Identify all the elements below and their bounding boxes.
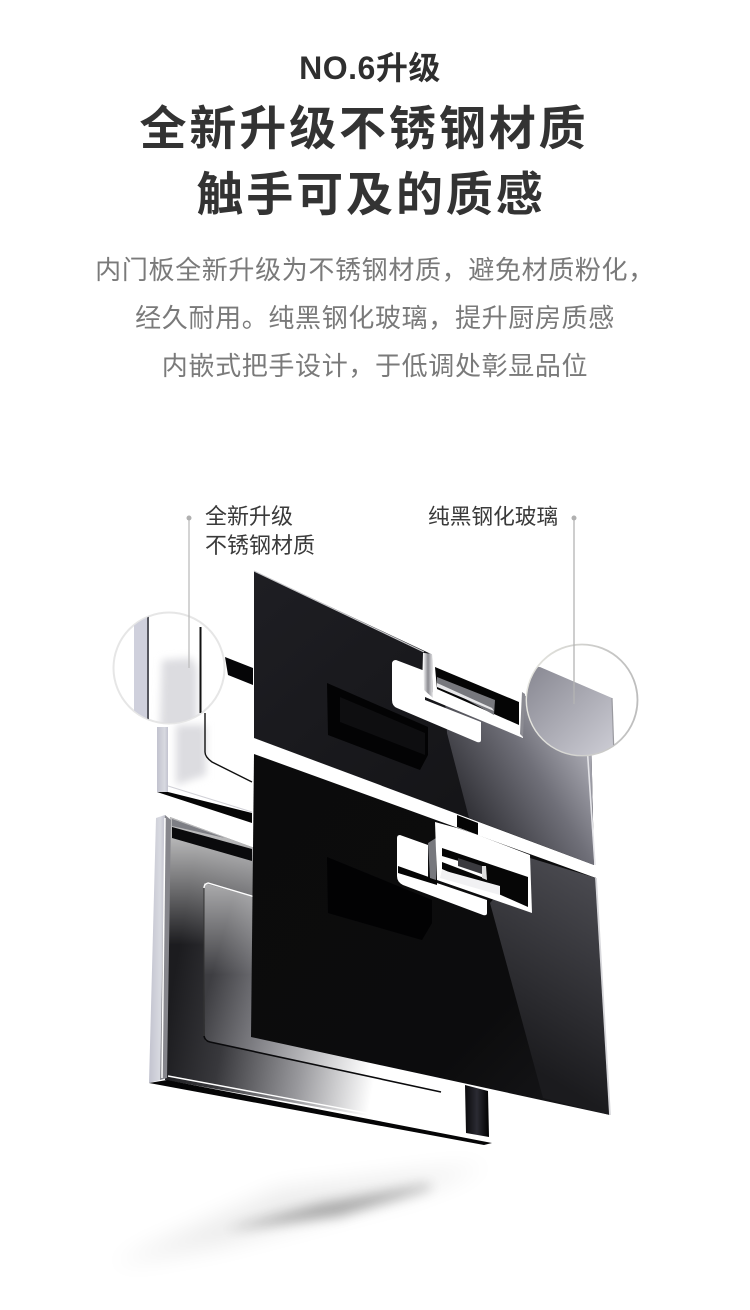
brushed patch [176, 725, 206, 785]
title: 触手可及的质感 [196, 168, 546, 221]
frame bottom edge [149, 1080, 492, 1145]
recessed handle [327, 857, 432, 940]
label [205, 504, 315, 558]
label: 全新升级 [205, 504, 293, 529]
magnifier: brushed steel [114, 612, 224, 730]
description text: 内嵌式把手设计，于低调处彰显品位 [162, 351, 588, 381]
glass reflection [490, 858, 610, 1115]
inner panel [204, 883, 445, 1092]
black connector [457, 815, 478, 835]
leader dot [186, 516, 192, 520]
label: 不锈钢材质 [205, 533, 315, 558]
leader dot [572, 516, 576, 520]
callout: black tempered glass [428, 504, 638, 760]
lower steel frame [149, 815, 500, 1145]
lower glass panel [251, 754, 610, 1115]
label: 纯黑钢化玻璃 [428, 504, 558, 529]
frame black band [157, 792, 252, 823]
title [139, 102, 589, 221]
leader line [188, 518, 190, 668]
description text: 经久耐用。纯黑钢化玻璃，提升厨房质感 [135, 303, 615, 333]
description text: 内门板全新升级为不锈钢材质，避免材质粉化， [95, 255, 655, 285]
recessed handle [327, 683, 428, 770]
upper glass panel [254, 571, 595, 865]
title: 全新升级不锈钢材质 [139, 102, 589, 155]
glass reflection [445, 683, 594, 865]
upper steel frame [157, 657, 253, 823]
frame dark slot [172, 827, 252, 861]
frame chrome lip [172, 819, 225, 838]
frame inner line [205, 713, 252, 782]
section label: NO.6升级 [299, 50, 441, 86]
callout: stainless steel [114, 504, 315, 730]
floor shadow [110, 1165, 490, 1265]
white plate behind [397, 835, 487, 915]
chrome handle [422, 653, 525, 738]
frame highlight line [168, 1076, 430, 1125]
rear post [465, 1085, 489, 1137]
leader line [573, 518, 575, 704]
magnifier: glass corner [520, 644, 638, 760]
frame edge strip [149, 815, 165, 1083]
white cut-out [392, 660, 481, 742]
description text [95, 255, 655, 381]
white plate front [435, 822, 532, 913]
